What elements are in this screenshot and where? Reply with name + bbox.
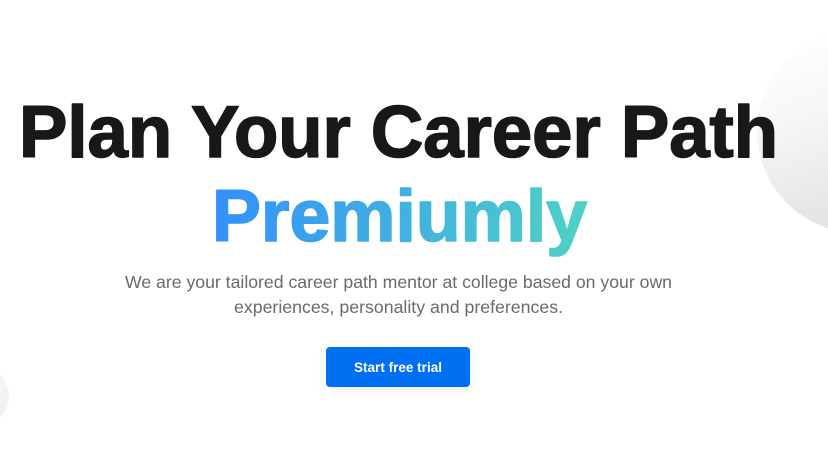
button: Start free trial [326,347,470,387]
subheading [125,272,672,317]
heading: Premiumly: Premiumly [212,176,587,257]
decorative circle: bottom left [0,366,9,426]
button: Start free trial: Start free trial [354,359,442,375]
subheading: experiences, personality and preferences. [234,297,563,317]
heading: Plan Your Career Path: Plan Your Career Path [19,92,778,173]
decorative circle: top right [757,29,828,233]
subheading: We are your tailored career path mentor at college based on your own [125,272,672,292]
